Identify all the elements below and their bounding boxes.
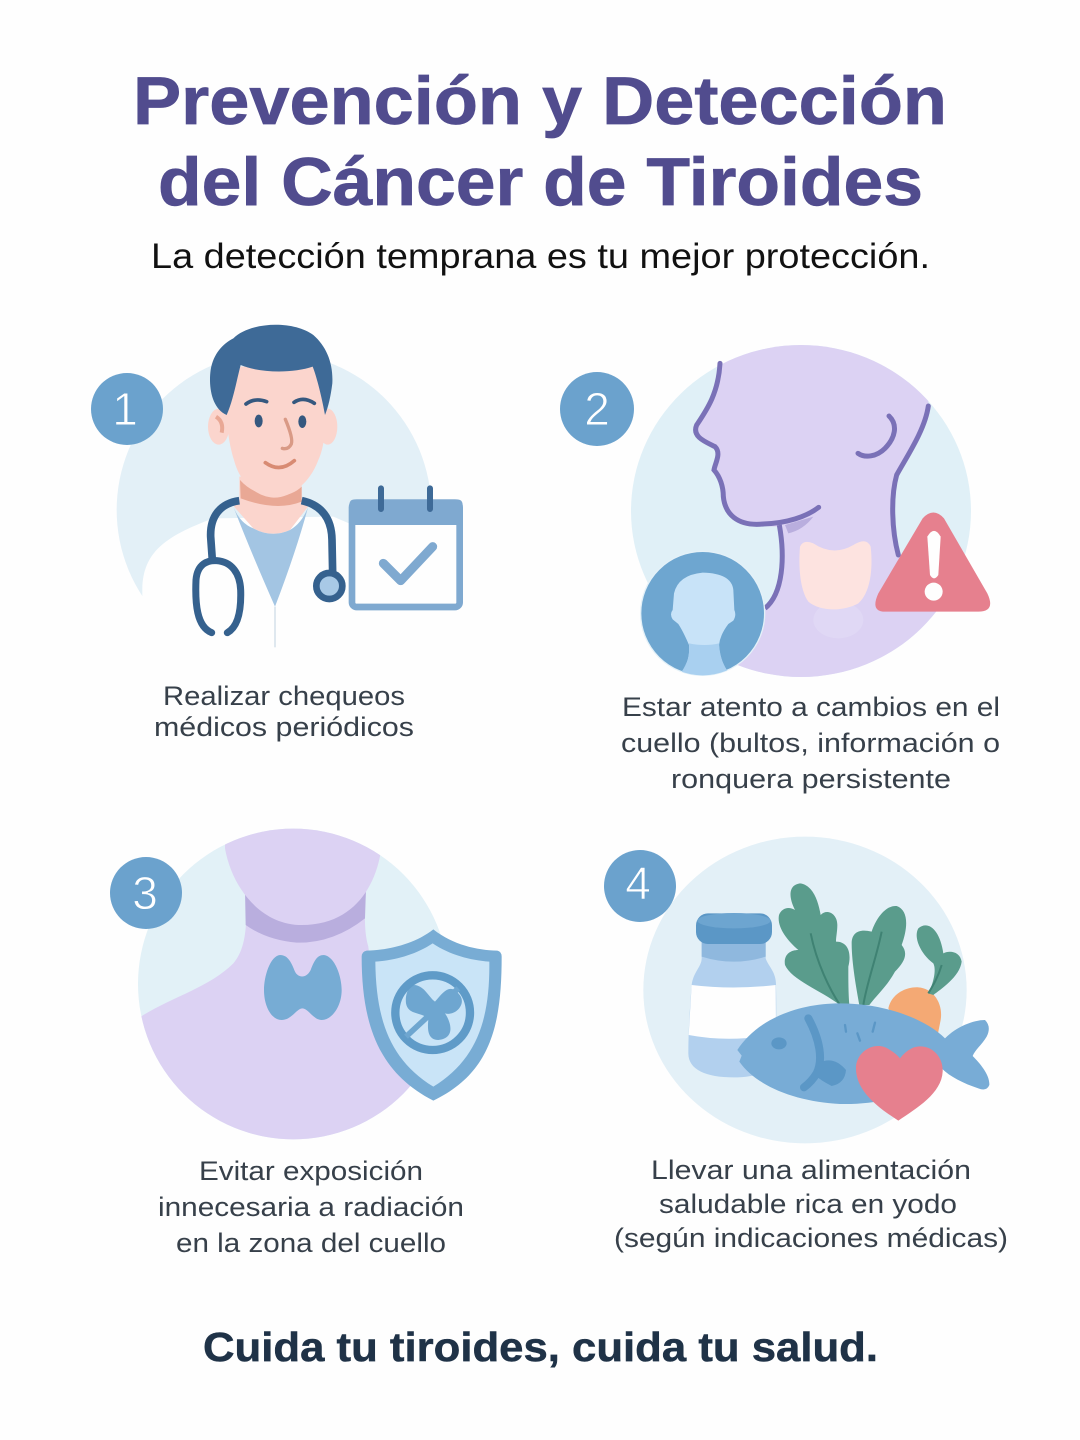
- caption 4: [614, 1155, 1008, 1253]
- caption 2: cuello (bultos, información o: [621, 728, 1000, 758]
- leaves: [779, 883, 962, 1005]
- caption 3: innecesaria a radiación: [158, 1192, 464, 1222]
- caption 1: [154, 681, 414, 742]
- footer tagline: Cuida tu tiroides, cuida tu salud.: [203, 1324, 878, 1370]
- caption 1: Realizar chequeos: [163, 681, 405, 711]
- carrot: [888, 987, 941, 1037]
- chin shadow: [245, 888, 366, 943]
- title: Prevención y Detección: [133, 63, 947, 139]
- ears: [208, 409, 229, 445]
- panel: step 3 radiation: [110, 820, 502, 1258]
- caption 4: (según indicaciones médicas): [614, 1223, 1008, 1253]
- number badge 4: 4: [625, 857, 651, 909]
- caption 2: [621, 692, 1000, 794]
- caption 2: ronquera persistente: [671, 764, 951, 794]
- face: [226, 367, 326, 498]
- number badge 2: 2: [584, 383, 610, 435]
- caption 3: en la zona del cuello: [176, 1228, 446, 1258]
- shield: [362, 929, 502, 1101]
- number badge 3: [110, 857, 182, 929]
- jar: [688, 913, 776, 1077]
- neck and collar: [234, 477, 308, 534]
- number badge 4: [604, 850, 676, 922]
- stethoscope: [211, 501, 333, 573]
- caption 3: Evitar exposición: [199, 1156, 423, 1186]
- illustration: neck with thyroid and shield: [138, 828, 502, 1140]
- chin: [225, 820, 381, 925]
- caption 3: [158, 1156, 464, 1258]
- profile outline: [696, 363, 819, 524]
- panel: step 4 nutrition: [604, 837, 1008, 1253]
- number badge 1: 1: [112, 383, 138, 435]
- caption 4: Llevar una alimentación: [651, 1155, 971, 1185]
- head silhouette avatar: [641, 551, 765, 677]
- caption 2: Estar atento a cambios en el: [622, 692, 1000, 722]
- heart: [856, 1046, 943, 1121]
- title: [133, 63, 947, 220]
- number badge 1: [91, 373, 163, 445]
- brows, eyes, nose, mouth: [246, 399, 314, 404]
- panel: step 1 checkups: [91, 325, 480, 742]
- panel: step 2 neck changes: [560, 330, 1000, 794]
- warning triangle: [875, 512, 990, 612]
- number badge 2: [560, 372, 634, 446]
- subtitle: La detección temprana es tu mejor protección.: [151, 237, 930, 276]
- fish: [737, 1003, 989, 1104]
- thyroid: [264, 955, 342, 1020]
- number badge 3: 3: [132, 867, 158, 919]
- shirt: [233, 507, 308, 607]
- title: del Cáncer de Tiroides: [158, 144, 923, 220]
- hair: [210, 325, 332, 415]
- caption 4: saludable rica en yodo: [659, 1189, 957, 1219]
- illustration: neck profile with warning: [631, 330, 990, 697]
- thyroid area: [813, 602, 863, 638]
- caption 1: médicos periódicos: [154, 712, 414, 742]
- illustration: iodine jar, vegetables, fish and heart: [643, 837, 989, 1143]
- illustration: doctor with calendar: [117, 325, 480, 683]
- calendar: [352, 503, 460, 607]
